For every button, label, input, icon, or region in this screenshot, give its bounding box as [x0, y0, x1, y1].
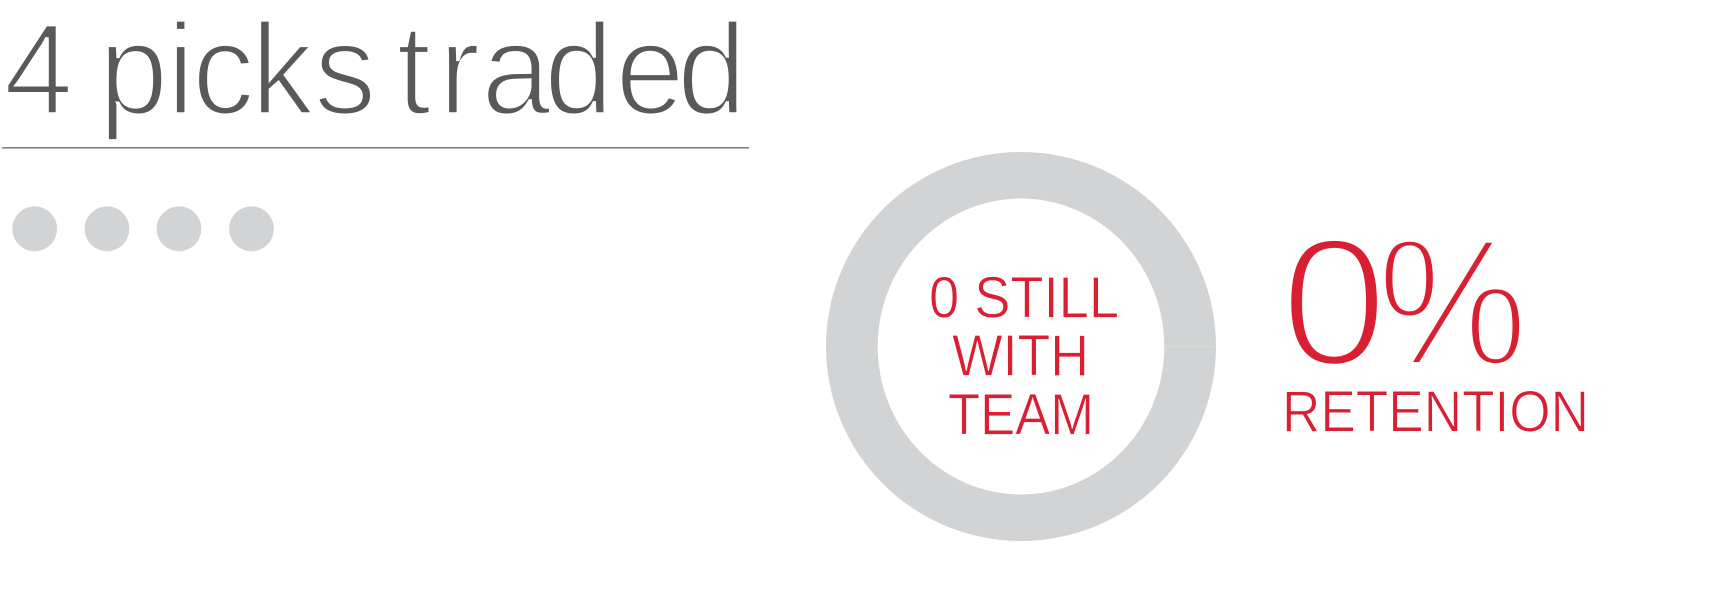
label line 3: TEAM [948, 382, 1094, 448]
dot 4 [229, 206, 274, 251]
retention percentage: % [1377, 200, 1528, 404]
dot 1 [12, 206, 57, 251]
retention label: RETENTION [1282, 380, 1589, 444]
title rule [2, 147, 749, 149]
retention percentage: 0 [1281, 200, 1388, 404]
donut chart [826, 152, 1216, 541]
retention percentage [1281, 200, 1528, 404]
pick dots [12, 206, 274, 251]
retention stat [1281, 200, 1589, 444]
title: 4 picks traded [4, 0, 746, 143]
label line 2: WITH [952, 324, 1089, 388]
donut ring [826, 152, 1216, 541]
ring seam [1164, 346, 1216, 347]
dot 3 [157, 206, 201, 251]
donut label [929, 266, 1119, 448]
dot 2 [85, 206, 129, 251]
label line 1: 0 STILL [929, 266, 1119, 330]
